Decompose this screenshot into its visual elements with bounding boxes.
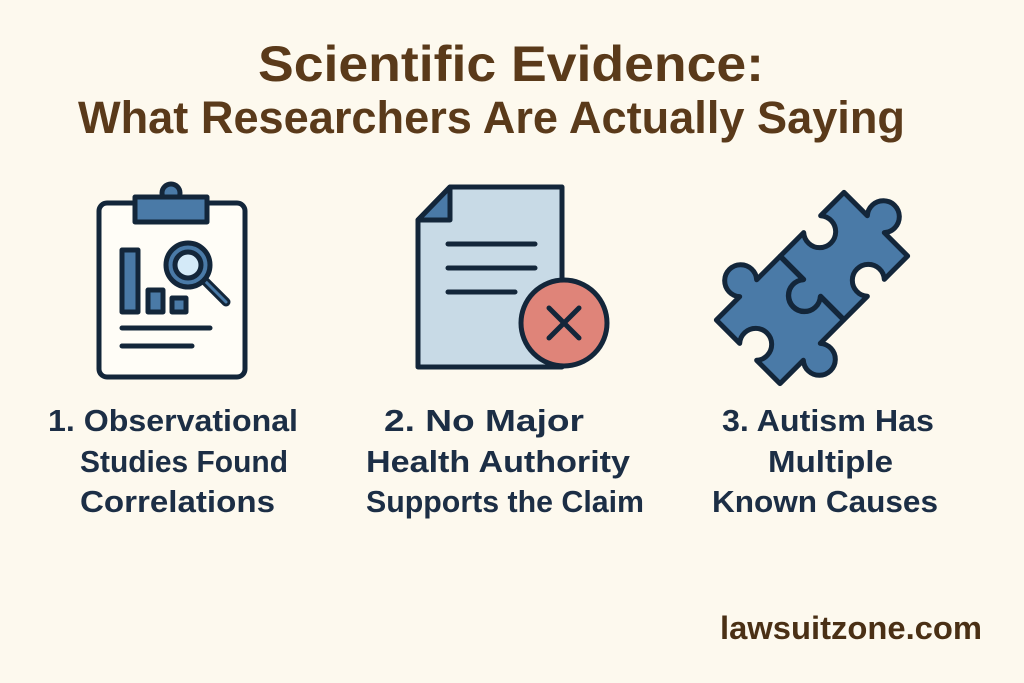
label 3: 3. Autism Has — [722, 403, 934, 438]
title — [78, 36, 905, 143]
title: Scientific Evidence: — [258, 36, 764, 92]
icon: clipboard with chart and magnifier — [99, 184, 245, 377]
label 1: 1. Observational — [48, 403, 298, 438]
label 1 — [48, 403, 298, 519]
label 2: 2. No Major — [384, 403, 584, 438]
footer: website: lawsuitzone.com — [720, 610, 982, 646]
label 1: Studies Found — [80, 444, 288, 479]
label 2 — [366, 403, 644, 519]
label 2: Supports the Claim — [366, 484, 644, 519]
label 3: Multiple — [768, 444, 893, 479]
title: What Researchers Are Actually Saying — [78, 92, 905, 143]
icon: document with red X — [418, 187, 607, 367]
icon: puzzle pieces — [698, 174, 926, 402]
label 1: Correlations — [80, 484, 275, 519]
label 3: Known Causes — [712, 484, 938, 519]
label 2: Health Authority — [366, 444, 631, 479]
label 3 — [712, 403, 938, 519]
